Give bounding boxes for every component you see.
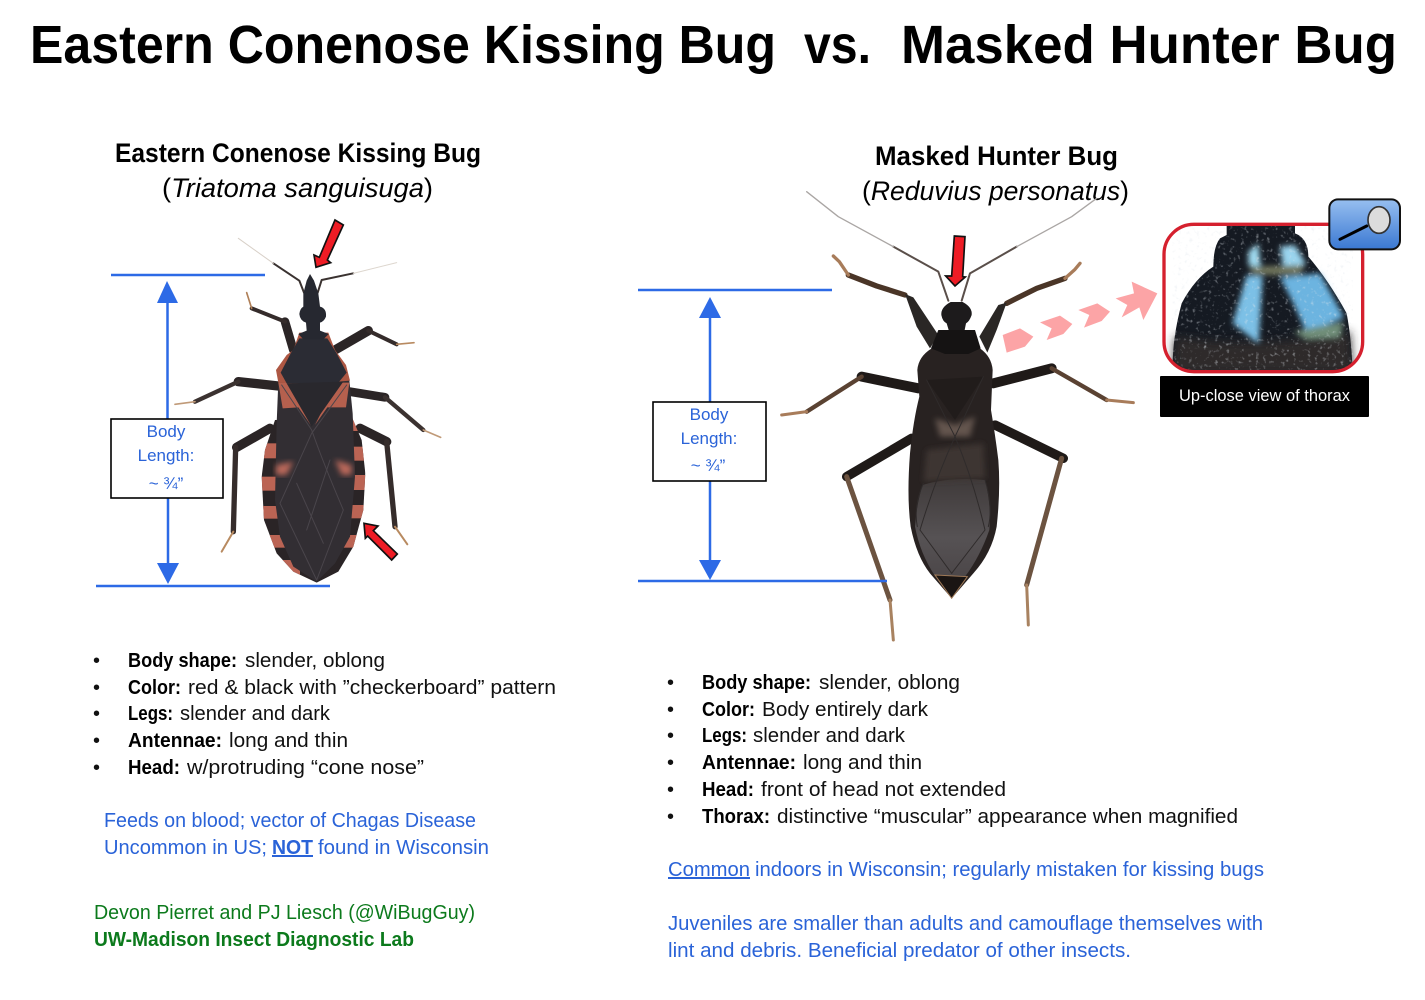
antennae bbox=[807, 192, 1097, 301]
bullet list: masked hunter traits: slender, oblong bbox=[819, 672, 960, 694]
body length measure bbox=[96, 275, 330, 586]
title: Eastern Conenose Kissing Bug bbox=[30, 15, 776, 75]
bullet list: masked hunter traits: front of head not extended bbox=[761, 779, 1006, 801]
wing veins bbox=[916, 377, 990, 573]
bullet list: masked hunter traits: Body shape: bbox=[702, 672, 811, 694]
bullet list: masked hunter traits: slender and dark bbox=[753, 725, 906, 747]
bullet list: kissing bug traits: red & black with ”checkerboard” pattern bbox=[188, 677, 556, 699]
bullet list: kissing bug traits: Legs: bbox=[128, 703, 173, 725]
head bbox=[941, 302, 972, 330]
abdomen tip bbox=[935, 575, 967, 598]
note: juveniles bbox=[668, 913, 1263, 962]
illustration: masked hunter bug bbox=[782, 192, 1133, 640]
note: feeds on blood bbox=[104, 810, 489, 859]
bullet list: kissing bug traits: • bbox=[93, 677, 100, 699]
bullet list: masked hunter traits: Legs: bbox=[702, 725, 747, 747]
arrow: to head bbox=[946, 236, 965, 286]
body length measure: ~ ¾” bbox=[149, 474, 184, 493]
bullet list: kissing bug traits bbox=[93, 650, 556, 779]
bullet list: masked hunter traits: • bbox=[667, 806, 674, 828]
legs bbox=[175, 293, 441, 552]
antennae bbox=[238, 238, 397, 293]
heading: kissing bug name: Eastern Conenose Kissing Bug bbox=[115, 138, 481, 168]
legs bbox=[782, 256, 1133, 640]
note: juveniles: Juveniles are smaller than adults and camouflage themselves with bbox=[668, 913, 1263, 935]
bullet list: kissing bug traits: slender and dark bbox=[180, 703, 331, 725]
credits: UW-Madison Insect Diagnostic Lab bbox=[94, 929, 414, 951]
note: feeds on blood: found in Wisconsin bbox=[318, 837, 489, 859]
heading: kissing bug name bbox=[115, 138, 481, 203]
body bbox=[908, 348, 999, 598]
title bbox=[30, 15, 1397, 75]
bullet list: masked hunter traits: • bbox=[667, 752, 674, 774]
abdomen with checkerboard edge bbox=[262, 418, 366, 582]
bullet list: masked hunter traits: distinctive “muscular” appearance when magnified bbox=[777, 806, 1238, 828]
bullet list: masked hunter traits: • bbox=[667, 779, 674, 801]
caption: up-close view of thorax: Up-close view of thorax bbox=[1179, 386, 1350, 405]
bullet list: kissing bug traits: Color: bbox=[128, 677, 181, 699]
body length measure: Length: bbox=[681, 429, 737, 448]
magnifier button bbox=[1329, 199, 1400, 249]
bullet list: masked hunter traits: • bbox=[667, 672, 674, 694]
bullet list: masked hunter traits: Antennae: bbox=[702, 752, 796, 774]
bullet list: masked hunter traits: Head: bbox=[702, 779, 754, 801]
thorax magnified view bbox=[1003, 199, 1400, 373]
bullet list: masked hunter traits bbox=[667, 672, 1238, 828]
bullet list: masked hunter traits: Color: bbox=[702, 699, 755, 721]
note: feeds on blood: Feeds on blood; vector of Chagas Disease bbox=[104, 810, 476, 832]
heading: masked hunter name: Masked Hunter Bug bbox=[875, 141, 1118, 171]
wing veins bbox=[280, 385, 347, 580]
red rounded frame bbox=[1164, 224, 1363, 372]
body length measure: ~ ¾” bbox=[691, 456, 726, 475]
note: common indoors: Common bbox=[668, 859, 750, 881]
bullet list: masked hunter traits: • bbox=[667, 699, 674, 721]
illustration: kissing bug bbox=[175, 220, 441, 587]
body length measure: Body bbox=[147, 422, 186, 441]
title: vs. bbox=[804, 15, 871, 75]
title: Masked Hunter Bug bbox=[901, 15, 1397, 75]
body length measure bbox=[638, 290, 887, 581]
caption: up-close view of thorax bbox=[1160, 376, 1369, 417]
bullet list: masked hunter traits: Body entirely dark bbox=[762, 699, 929, 721]
thorax close-up photo bbox=[1173, 225, 1353, 373]
bullet list: kissing bug traits: slender, oblong bbox=[245, 650, 385, 672]
note: common indoors: indoors in Wisconsin; regularly mistaken for kissing bugs bbox=[755, 859, 1264, 881]
bullet list: kissing bug traits: w/protruding “cone nose” bbox=[186, 757, 424, 779]
note: feeds on blood: Uncommon in US; bbox=[104, 837, 267, 859]
bullet list: masked hunter traits: Thorax: bbox=[702, 806, 770, 828]
bullet list: kissing bug traits: Head: bbox=[128, 757, 180, 779]
head with cone nose bbox=[298, 274, 329, 339]
bullet list: masked hunter traits: long and thin bbox=[803, 752, 922, 774]
note: juveniles: lint and debris. Beneficial predator of other insects. bbox=[668, 940, 1131, 962]
arrow: to abdomen edge bbox=[364, 523, 397, 560]
body length measure: Length: bbox=[138, 446, 194, 465]
panel: masked hunter bug bbox=[638, 141, 1400, 962]
panel: eastern conenose kissing bug bbox=[93, 138, 556, 951]
bullet list: kissing bug traits: Body shape: bbox=[128, 650, 237, 672]
body length measure: Body bbox=[690, 405, 729, 424]
credits: Devon Pierret and PJ Liesch (@WiBugGuy) bbox=[94, 902, 475, 924]
bullet list: kissing bug traits: • bbox=[93, 730, 100, 752]
heading: kissing bug name: (Triatoma sanguisuga) bbox=[162, 173, 433, 203]
heading: masked hunter name bbox=[862, 141, 1129, 206]
bullet list: kissing bug traits: • bbox=[93, 757, 100, 779]
bullet list: kissing bug traits: Antennae: bbox=[128, 730, 222, 752]
bullet list: masked hunter traits: • bbox=[667, 725, 674, 747]
pink dashed arrow bbox=[1003, 282, 1157, 353]
collar bbox=[931, 330, 981, 354]
arrow: to head bbox=[314, 220, 343, 267]
note: feeds on blood: NOT bbox=[272, 837, 313, 859]
heading: masked hunter name: (Reduvius personatus) bbox=[862, 176, 1129, 206]
credits bbox=[94, 902, 475, 951]
wings and thorax bbox=[275, 380, 355, 582]
bullet list: kissing bug traits: • bbox=[93, 703, 100, 725]
bullet list: kissing bug traits: • bbox=[93, 650, 100, 672]
bullet list: kissing bug traits: long and thin bbox=[229, 730, 348, 752]
